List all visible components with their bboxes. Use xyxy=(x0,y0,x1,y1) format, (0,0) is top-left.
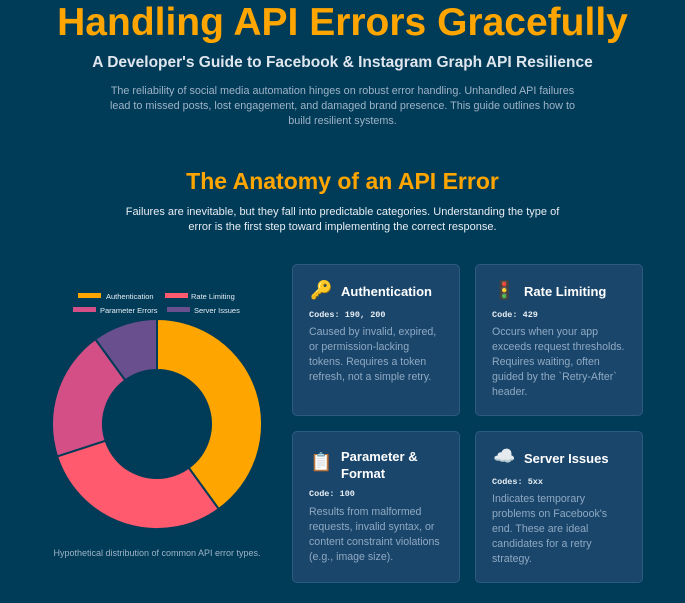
title: Handling API Errors Gracefully xyxy=(57,1,628,44)
card: authentication xyxy=(292,264,460,416)
icon: traffic light: 🚦 xyxy=(493,280,515,300)
card: server: Server Issues xyxy=(524,451,609,466)
card: parameter: Results from malformed requests, invalid syntax, or content constraint violations (e.g., image size). xyxy=(309,506,440,563)
card: server: Codes: 5xx xyxy=(492,477,543,487)
card: rate limiting: Occurs when your app exceeds request thresholds. Requires waiting, often guided by the `Retry-After` header. xyxy=(492,326,624,398)
icon: key: 🔑 xyxy=(310,280,332,300)
subtitle: A Developer's Guide to Facebook & Instagram Graph API Resilience xyxy=(92,54,593,71)
section text: Failures are inevitable, but they fall into predictable categories. Understanding the type of error is the first step toward implementing the correct response. xyxy=(126,206,559,233)
card: authentication: Authentication xyxy=(341,284,432,299)
card: server xyxy=(475,431,643,583)
section heading: The Anatomy of an API Error xyxy=(186,168,499,194)
card: authentication: Codes: 190, 200 xyxy=(309,310,386,320)
card: parameter: Code: 100 xyxy=(309,489,355,499)
legend: Server Issues xyxy=(194,306,240,315)
card: parameter: Format xyxy=(341,466,385,481)
card: parameter: Parameter & xyxy=(341,449,418,464)
icon: clipboard: 📋 xyxy=(310,452,332,472)
donut chart xyxy=(53,292,262,558)
card: rate limiting: Rate Limiting xyxy=(524,284,606,299)
legend: Authentication xyxy=(106,292,154,301)
card: authentication: Caused by invalid, expired, or permission-lacking tokens. Requires a token refresh, not a simple retry. xyxy=(309,326,436,383)
legend: Rate Limiting xyxy=(191,292,235,301)
intro text: The reliability of social media automation hinges on robust error handling. Unhandled API failures lead to missed posts, lost engagement, and damaged brand presence. This guide outlines how to build resilient systems. xyxy=(110,85,575,127)
card: rate limiting: Code: 429 xyxy=(492,310,538,320)
card: parameter xyxy=(292,431,460,583)
legend xyxy=(73,292,240,315)
card: server: Indicates temporary problems on Facebook's end. These are ideal candidates for a retry strategy. xyxy=(492,493,607,565)
chart caption: Hypothetical distribution of common API error types. xyxy=(53,548,261,558)
icon: cloud: ☁️ xyxy=(493,446,515,466)
legend: Parameter Errors xyxy=(100,306,158,315)
card: rate limiting xyxy=(475,264,643,416)
